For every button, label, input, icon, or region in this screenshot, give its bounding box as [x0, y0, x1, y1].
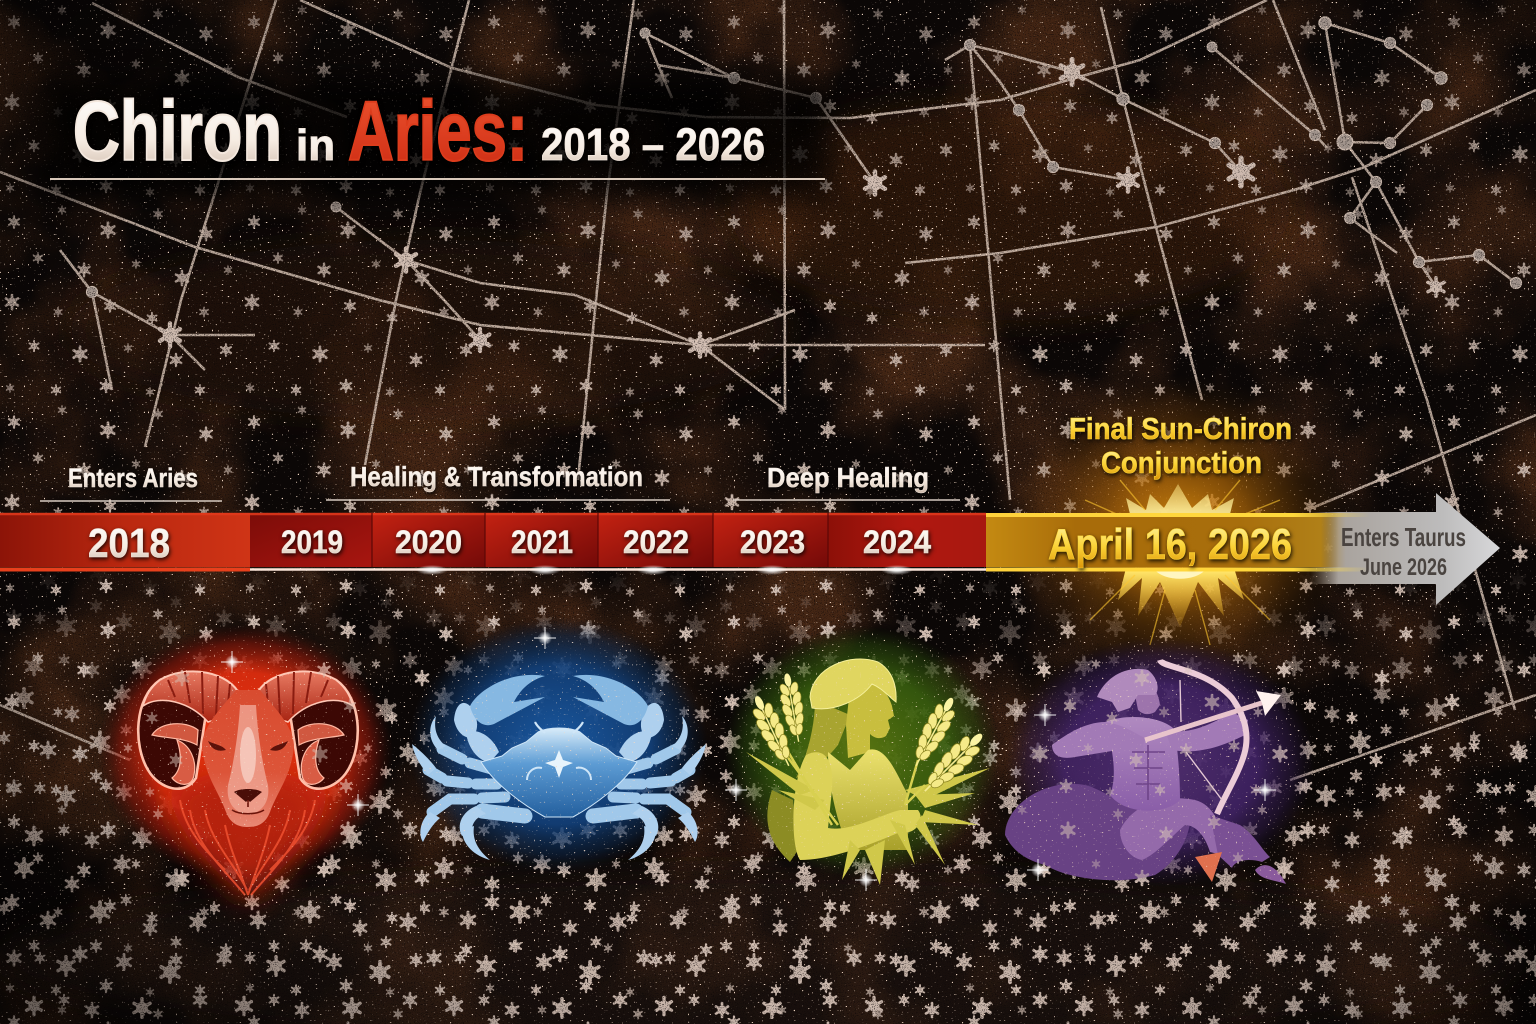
segment: 2018 [0, 513, 250, 567]
bow and arrow [1145, 660, 1281, 814]
year labels: 2019 [281, 524, 343, 560]
archer arms [1052, 712, 1248, 758]
ram left horn [138, 672, 240, 789]
virgo wheat and leaves [744, 671, 992, 885]
arrow text: June 2026 [1360, 554, 1447, 581]
arrow text: Enters Taurus [1341, 522, 1466, 552]
timeline labels: Deep Healing [767, 462, 929, 493]
stars over zodiac figures [110, 627, 1320, 900]
ram right horn [256, 672, 358, 789]
virgo dress and arm [793, 749, 921, 860]
segments: 2023 and 2024 [713, 513, 986, 567]
gold callout text: Final Sun-Chiron [1069, 411, 1292, 446]
sun-burst glow [1005, 375, 1355, 685]
arrow: enters Taurus [1310, 493, 1500, 605]
archer torso [1105, 717, 1180, 811]
title underline [50, 178, 825, 180]
title: Aries: [348, 84, 528, 178]
label underlines [40, 500, 960, 501]
year labels: 2021 [511, 524, 573, 560]
ram aura [97, 624, 393, 900]
constellation lines [0, 0, 1536, 780]
crab shell [481, 722, 637, 817]
year labels: 2024 [863, 524, 931, 560]
title: 2018 – 2026 [541, 119, 765, 170]
milestone sparkles [416, 565, 913, 575]
title: Chiron [73, 84, 282, 178]
arrow text [1341, 522, 1466, 581]
virgo face and neck [846, 682, 894, 758]
icon: Aries ram [97, 624, 393, 900]
sagittarius aura [1005, 637, 1315, 887]
icon: Sagittarius centaur archer [1005, 637, 1315, 887]
crab aura [408, 617, 708, 873]
virgo back hair [796, 700, 850, 778]
crab left legs and claw [412, 675, 545, 860]
icon: Cancer crab [408, 617, 708, 873]
virgo aura [724, 626, 1000, 878]
virgo hair [810, 659, 896, 709]
segments: 2019 to 2022 [250, 513, 713, 567]
virgo long hair [767, 790, 798, 862]
year labels [88, 520, 931, 566]
archer head and hair [1097, 669, 1160, 714]
icon: Virgo maiden with wheat [724, 626, 1000, 885]
timeline labels [68, 461, 929, 493]
year labels: 2022 [623, 524, 689, 560]
gold callout text: Conjunction [1101, 445, 1262, 480]
title backdrop band [40, 80, 830, 196]
bottom edge line [0, 568, 1370, 572]
timeline labels: Enters Aries [68, 463, 198, 493]
constellation star nodes [86, 17, 1522, 357]
timeline labels: Healing & Transformation [350, 461, 643, 492]
gold callout text: April 16, 2026 [1048, 520, 1292, 569]
title [73, 84, 765, 178]
year labels: 2018 [88, 520, 170, 566]
horse body and legs [1005, 784, 1286, 884]
timeline bar [0, 493, 1500, 605]
title: in [296, 121, 335, 170]
year labels: 2023 [740, 524, 805, 560]
ram face [202, 690, 294, 827]
year labels: 2020 [395, 524, 462, 560]
ram beard [180, 800, 315, 895]
crab right legs and claw [573, 675, 706, 860]
gold segment [986, 513, 1346, 567]
gold callout text [1048, 411, 1292, 569]
